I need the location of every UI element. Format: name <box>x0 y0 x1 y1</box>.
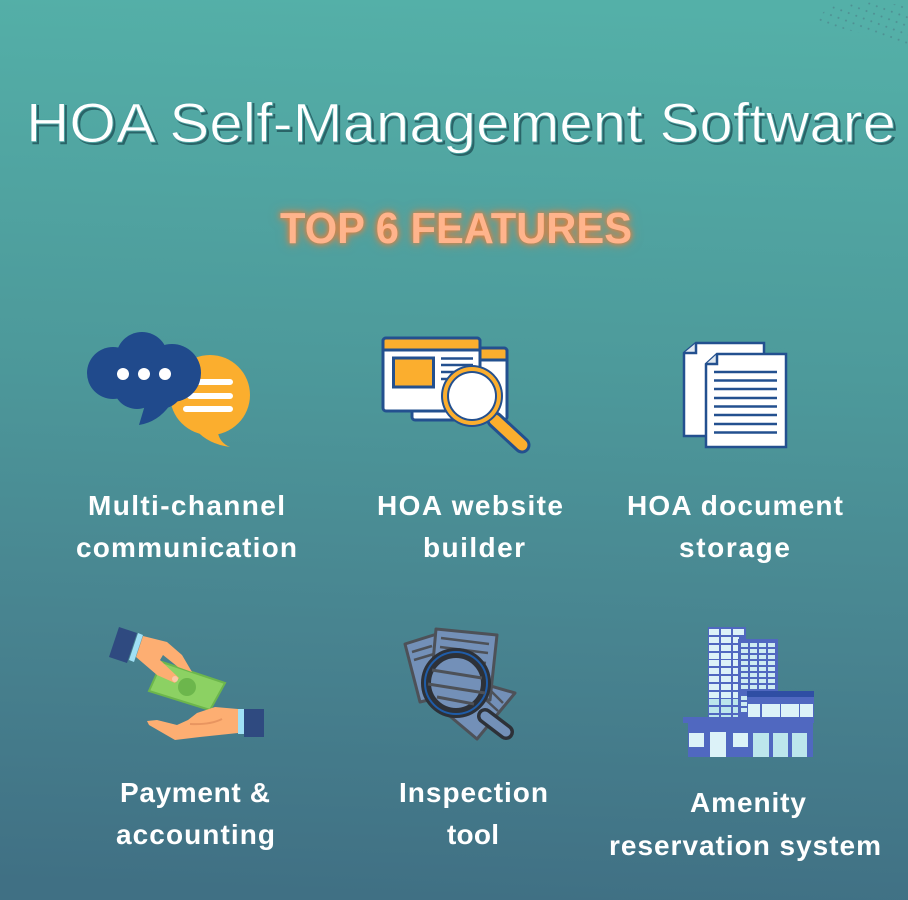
subtitle: TOP 6 FEATURES <box>280 204 632 253</box>
icon: papers with magnifier <box>405 629 515 739</box>
icon: browser windows with magnifier <box>383 338 522 445</box>
label: inspection tool <box>399 777 548 850</box>
feature: inspection tool <box>399 629 548 850</box>
label: HOA document storage: HOA document <box>627 490 843 521</box>
label: HOA document storage: storage <box>679 532 790 563</box>
label: HOA website builder: HOA website <box>377 490 563 521</box>
label: payment and accounting <box>116 777 275 850</box>
icon: hands exchanging money <box>109 627 264 740</box>
speckled corner texture <box>812 2 908 45</box>
label: multi-channel communication: communication <box>76 532 297 563</box>
label: amenity reservation system <box>609 787 881 861</box>
feature: payment and accounting <box>109 627 275 850</box>
feature: document storage <box>627 343 843 563</box>
label: inspection tool: Inspection <box>399 777 548 808</box>
label: HOA website builder <box>377 490 563 563</box>
label: multi-channel communication: Multi-channel <box>88 490 285 521</box>
title: HOA Self-Management Software <box>26 91 896 154</box>
label: payment and accounting: Payment & <box>120 777 270 808</box>
feature: website builder <box>377 338 563 563</box>
icon: stacked documents <box>684 343 786 447</box>
icon: buildings <box>683 627 814 757</box>
label: amenity reservation system: reservation system <box>609 830 881 861</box>
feature: multi-channel communication <box>76 332 297 563</box>
label: payment and accounting: accounting <box>116 819 275 850</box>
icon: speech bubbles <box>87 332 250 447</box>
label: multi-channel communication <box>76 490 297 563</box>
label: inspection tool: tool <box>447 819 499 850</box>
feature: amenity reservation system <box>609 627 881 861</box>
label: HOA website builder: builder <box>423 532 525 563</box>
label: HOA document storage <box>627 490 843 563</box>
label: amenity reservation system: Amenity <box>690 787 806 818</box>
